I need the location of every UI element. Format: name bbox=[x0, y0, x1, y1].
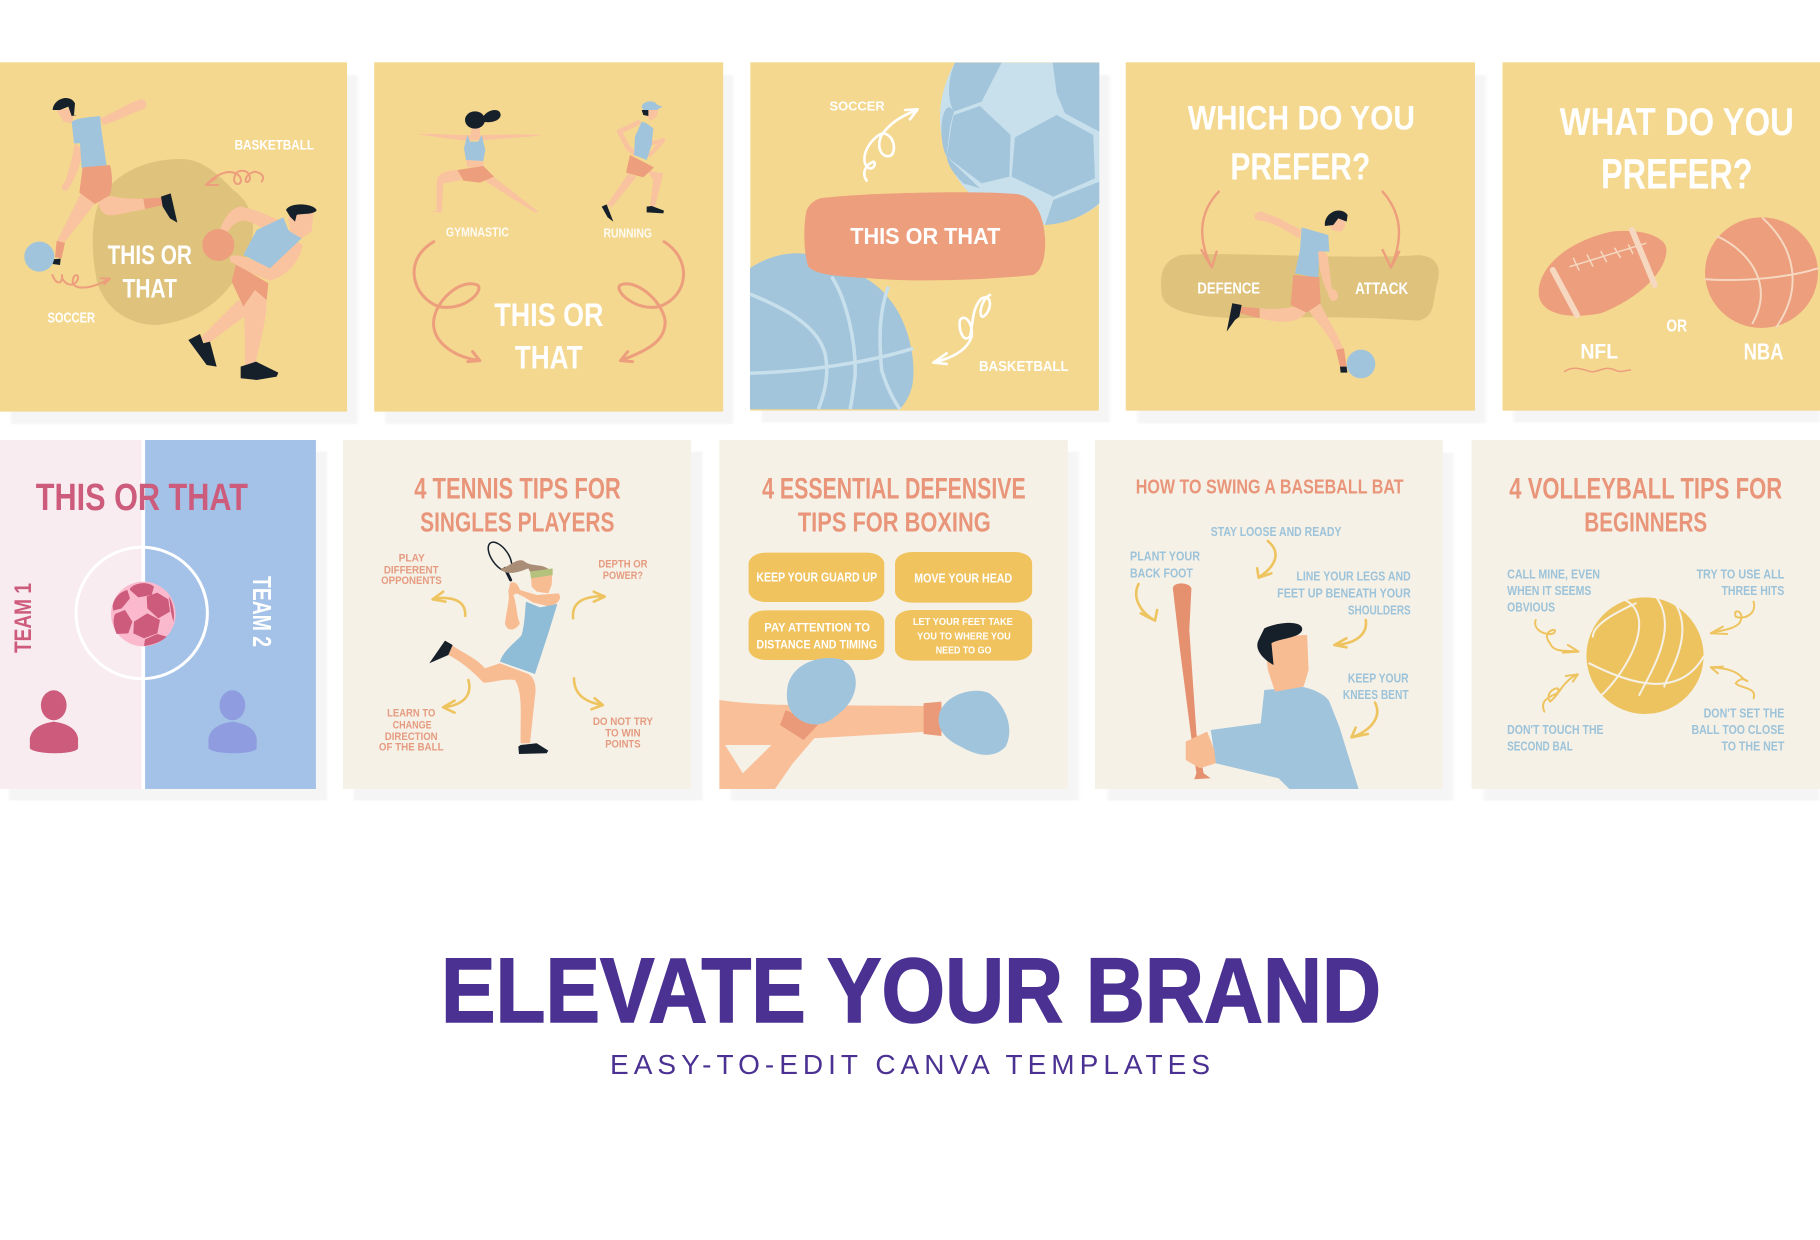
label: team 2: TEAM 2 bbox=[247, 576, 277, 647]
arrows bbox=[433, 592, 605, 713]
arrow: right loop bbox=[619, 242, 684, 362]
label: gymnastic: GYMNASTIC bbox=[446, 226, 509, 240]
panel: tennis tips bbox=[343, 440, 703, 801]
heading bbox=[108, 241, 192, 304]
badge: this or that bbox=[804, 192, 1045, 280]
panel: boxing tips: PAY ATTENTION TO bbox=[764, 621, 870, 635]
panel: boxing tips: LET YOUR FEET TAKE bbox=[913, 615, 1013, 627]
heading: SINGLES PLAYERS bbox=[420, 507, 614, 538]
panel: baseball swing tips: STAY LOOSE AND READY bbox=[1211, 524, 1342, 539]
panel: volleyball tips: DON'T TOUCH THE bbox=[1507, 723, 1604, 737]
soccer ball bbox=[111, 582, 176, 646]
heading: THAT bbox=[123, 274, 177, 304]
tip card: let your feet: NEED TO GO bbox=[936, 644, 991, 656]
icon: person team 1 bbox=[30, 690, 78, 753]
panel: baseball swing tips: BACK FOOT bbox=[1130, 565, 1193, 580]
tip: change direction: DIRECTION bbox=[385, 730, 438, 742]
panel: what do you prefer: OR bbox=[1666, 316, 1687, 335]
runner figure bbox=[602, 101, 664, 222]
tip: depth or power bbox=[598, 557, 648, 581]
infographic canvas: 4 ESSENTIAL DEFENSIVE bbox=[762, 473, 1026, 505]
tip: call mine bbox=[1507, 568, 1600, 615]
basketball bbox=[750, 253, 914, 409]
label: basketball: BASKETBALL bbox=[235, 137, 314, 153]
heading bbox=[1509, 473, 1782, 538]
panel: baseball swing tips: KNEES BENT bbox=[1343, 687, 1409, 702]
squiggle bbox=[1564, 368, 1631, 372]
panel: this or that with balls: THIS OR THAT bbox=[850, 224, 1000, 250]
panel background bbox=[0, 440, 327, 801]
panel: what do you prefer bbox=[1503, 62, 1820, 423]
tip card: move your head bbox=[895, 552, 1032, 603]
heading bbox=[414, 473, 621, 538]
heading bbox=[1560, 100, 1794, 198]
tip: do not try to win points: TO WIN bbox=[605, 727, 641, 739]
arrow: basketball spiral bbox=[206, 171, 263, 185]
basketball bbox=[1705, 217, 1818, 328]
panel: volleyball tips: CALL MINE, EVEN bbox=[1507, 568, 1600, 581]
infographic canvas: FEET UP BENEATH YOUR bbox=[1277, 586, 1411, 601]
arrow: down to basketball bbox=[933, 295, 990, 364]
panel: boxing tips: KEEP YOUR GUARD UP bbox=[756, 571, 877, 585]
heading bbox=[1188, 99, 1415, 188]
arrow: left loop bbox=[414, 242, 480, 362]
panel: which do you prefer: DEFENCE bbox=[1197, 279, 1260, 297]
panel: which do you prefer: ATTACK bbox=[1355, 279, 1408, 298]
panel: boxing tips: DISTANCE AND TIMING bbox=[756, 638, 877, 651]
subtitle: EASY-TO-EDIT CANVA TEMPLATES bbox=[610, 1049, 1210, 1080]
tip: call mine: OBVIOUS bbox=[1507, 601, 1555, 615]
arrow: soccer spiral bbox=[52, 275, 110, 288]
heading bbox=[762, 473, 1026, 538]
gymnast figure bbox=[417, 110, 543, 213]
panel: boxing tips: MOVE YOUR HEAD bbox=[914, 570, 1012, 585]
panel: team 1 vs team 2 bbox=[0, 440, 327, 801]
tip: second ball bbox=[1507, 723, 1604, 754]
batter bbox=[1173, 583, 1359, 789]
label: team 1: TEAM 1 bbox=[10, 583, 37, 653]
panel: volleyball tips bbox=[1471, 440, 1820, 801]
panel: boxing tips: TIPS FOR BOXING bbox=[798, 507, 991, 538]
tip card: pay attention bbox=[749, 610, 884, 660]
tip: change direction bbox=[379, 707, 444, 753]
soccer player bbox=[24, 98, 177, 272]
boxer arms and gloves bbox=[719, 658, 1009, 789]
heading: PREFER? bbox=[1230, 145, 1370, 188]
panel: baseball swing tips: SHOULDERS bbox=[1348, 602, 1411, 617]
american football bbox=[1539, 230, 1666, 316]
panel: this or that with balls bbox=[750, 62, 1110, 423]
panel: this or that with balls: BASKETBALL bbox=[979, 358, 1069, 375]
tip: play different opponents: OPPONENTS bbox=[381, 574, 442, 586]
heading: 4 TENNIS TIPS FOR bbox=[414, 473, 621, 505]
tennis player bbox=[429, 538, 560, 754]
icon: person team 2 bbox=[208, 690, 257, 753]
heading: THIS OR bbox=[108, 241, 192, 270]
blob bbox=[1161, 254, 1439, 321]
tip card: let your feet bbox=[895, 610, 1032, 661]
volleyball bbox=[1586, 597, 1704, 714]
panel: this or that with balls: SOCCER bbox=[830, 98, 885, 114]
tip: play different opponents: PLAY bbox=[399, 552, 425, 564]
heading: THIS OR bbox=[494, 296, 603, 333]
panel: this or that soccer vs basketball bbox=[0, 62, 358, 424]
tip: plant your back foot bbox=[1130, 549, 1200, 580]
tip: change direction: OF THE BALL bbox=[379, 741, 444, 753]
tip: do not try to win points: DO NOT TRY bbox=[593, 715, 653, 727]
tip: depth or power: DEPTH OR bbox=[598, 557, 648, 570]
center circle bbox=[76, 547, 207, 679]
tip: second ball: SECOND BAL bbox=[1507, 740, 1573, 754]
soccer ball bbox=[940, 63, 1099, 225]
panel: baseball swing tips: PLANT YOUR bbox=[1130, 549, 1200, 564]
tip: play different opponents bbox=[381, 552, 442, 586]
heading: THIS OR THAT bbox=[36, 476, 248, 518]
arrow: to defence bbox=[1201, 192, 1219, 268]
tip: three hits bbox=[1696, 568, 1784, 598]
panel: what do you prefer: NFL bbox=[1580, 340, 1618, 363]
spiral arrows bbox=[1535, 602, 1754, 712]
blob bbox=[93, 159, 253, 325]
arrow: to attack bbox=[1383, 192, 1399, 268]
panel: boxing tips bbox=[719, 440, 1079, 801]
kicking player bbox=[1227, 211, 1375, 378]
tip: net distance bbox=[1691, 707, 1784, 754]
tip: line your legs bbox=[1277, 569, 1411, 617]
tip: do not try to win points: POINTS bbox=[605, 738, 641, 750]
panel: baseball swing tips: KEEP YOUR bbox=[1348, 670, 1409, 685]
tip: change direction: CHANGE bbox=[393, 718, 432, 731]
panel: baseball swing tips bbox=[1095, 440, 1454, 801]
tip card: keep your guard up bbox=[749, 553, 884, 602]
tip: change direction: LEARN TO bbox=[387, 707, 435, 719]
tip card: let your feet: YOU TO WHERE YOU bbox=[917, 630, 1011, 642]
heading: THAT bbox=[515, 340, 583, 376]
panel: volleyball tips: WHEN IT SEEMS bbox=[1507, 584, 1591, 598]
tip: depth or power: POWER? bbox=[603, 569, 643, 581]
title: ELEVATE YOUR BRAND bbox=[441, 940, 1381, 1042]
panel: which do you prefer bbox=[1126, 62, 1486, 423]
heading bbox=[494, 296, 603, 376]
panel: baseball swing tips: LINE YOUR LEGS AND bbox=[1296, 569, 1411, 584]
tip: keep knees bent bbox=[1343, 670, 1409, 702]
arrow: up to soccer bbox=[864, 109, 918, 181]
panel: which do you prefer: WHICH DO YOU bbox=[1188, 99, 1415, 137]
label: running: RUNNING bbox=[603, 225, 652, 241]
basketball player bbox=[188, 204, 317, 380]
label: soccer: SOCCER bbox=[48, 309, 95, 326]
tip: play different opponents: DIFFERENT bbox=[384, 563, 439, 576]
arrows bbox=[1136, 541, 1377, 737]
panel: this or that gymnastic vs running bbox=[374, 62, 733, 424]
tip: do not try to win points bbox=[593, 715, 653, 750]
